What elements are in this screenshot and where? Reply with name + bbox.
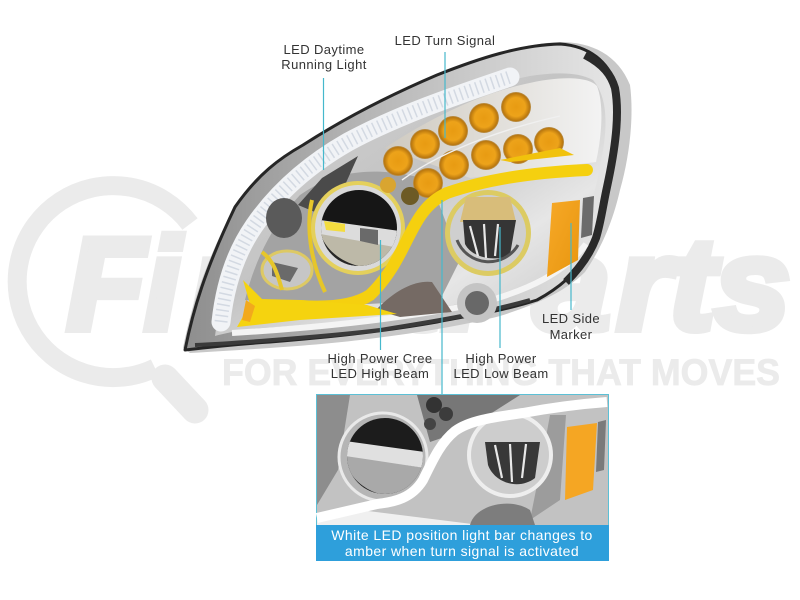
amber light bar bbox=[237, 148, 587, 327]
watermark magnifier bbox=[17, 186, 195, 410]
label: High Power LED Low Beam: High Power bbox=[465, 351, 537, 366]
lower dark wedge bbox=[376, 282, 452, 317]
label: LED Turn Signal: LED Turn Signal bbox=[395, 33, 495, 48]
watermark wordmark: nditPa bbox=[190, 211, 610, 357]
leader: low beam bbox=[499, 227, 501, 348]
high beam lens bbox=[311, 181, 405, 275]
label: LED Daytime Running Light: Running Light bbox=[281, 57, 367, 72]
small chrome reflectors left bbox=[262, 198, 312, 289]
lower fog lens bbox=[457, 283, 497, 323]
watermark logo bbox=[17, 186, 790, 410]
leader: turn signal bbox=[444, 52, 446, 138]
upper right chrome reflector bbox=[385, 78, 601, 178]
watermark wordmark: rts bbox=[617, 211, 790, 357]
side marker bbox=[547, 196, 594, 277]
label: LED Side Marker: Marker bbox=[550, 327, 593, 342]
dark wedge beside strip bbox=[298, 156, 358, 212]
label: High Power Cree LED High Beam: LED High Beam bbox=[331, 366, 429, 381]
leader: inset connector bbox=[441, 200, 443, 394]
lower dark seal bbox=[195, 300, 530, 345]
watermark tagline: FOR EVERYTHING THAT MOVES bbox=[222, 352, 780, 393]
yellow reflections left bbox=[262, 200, 325, 292]
inset white light bar bbox=[317, 402, 607, 518]
inset low beam bbox=[469, 414, 551, 496]
inset caption: White LED position light bar changes to bbox=[331, 527, 593, 543]
inset detail photo bbox=[316, 394, 609, 561]
label: LED Daytime Running Light: LED Daytime bbox=[284, 42, 364, 57]
inset side marker bbox=[565, 423, 597, 500]
label: High Power Cree LED High Beam: High Power Cree bbox=[328, 351, 432, 366]
turn signal divider bbox=[402, 116, 560, 180]
inset chrome reflections bbox=[317, 395, 350, 505]
leader: high beam bbox=[380, 240, 382, 350]
label: LED Side Marker: LED Side bbox=[542, 311, 600, 326]
dark inner reflector area bbox=[245, 172, 460, 305]
inset high beam bbox=[339, 413, 427, 501]
lamp dark band bbox=[185, 44, 617, 350]
daytime running light strip bbox=[221, 77, 510, 322]
watermark wordmark: Fi bbox=[67, 211, 183, 357]
inset lower lens bbox=[470, 504, 535, 525]
headlight assembly bbox=[183, 42, 632, 353]
low beam lens bbox=[445, 190, 531, 276]
leader: side marker bbox=[570, 223, 572, 310]
lamp inner chrome bbox=[215, 73, 606, 336]
turn signal LEDs bbox=[380, 92, 564, 205]
inset background bbox=[316, 394, 608, 560]
lower chrome trim bbox=[232, 244, 586, 333]
thick upper-right seal bbox=[566, 55, 617, 282]
inset caption: amber when turn signal is activated bbox=[345, 543, 579, 559]
lamp outer rim bbox=[183, 42, 632, 353]
watermark wordmark bbox=[67, 211, 790, 357]
label: High Power LED Low Beam: LED Low Beam bbox=[453, 366, 549, 381]
leader: daytime running light bbox=[322, 78, 324, 170]
inset caption band bbox=[316, 525, 609, 561]
